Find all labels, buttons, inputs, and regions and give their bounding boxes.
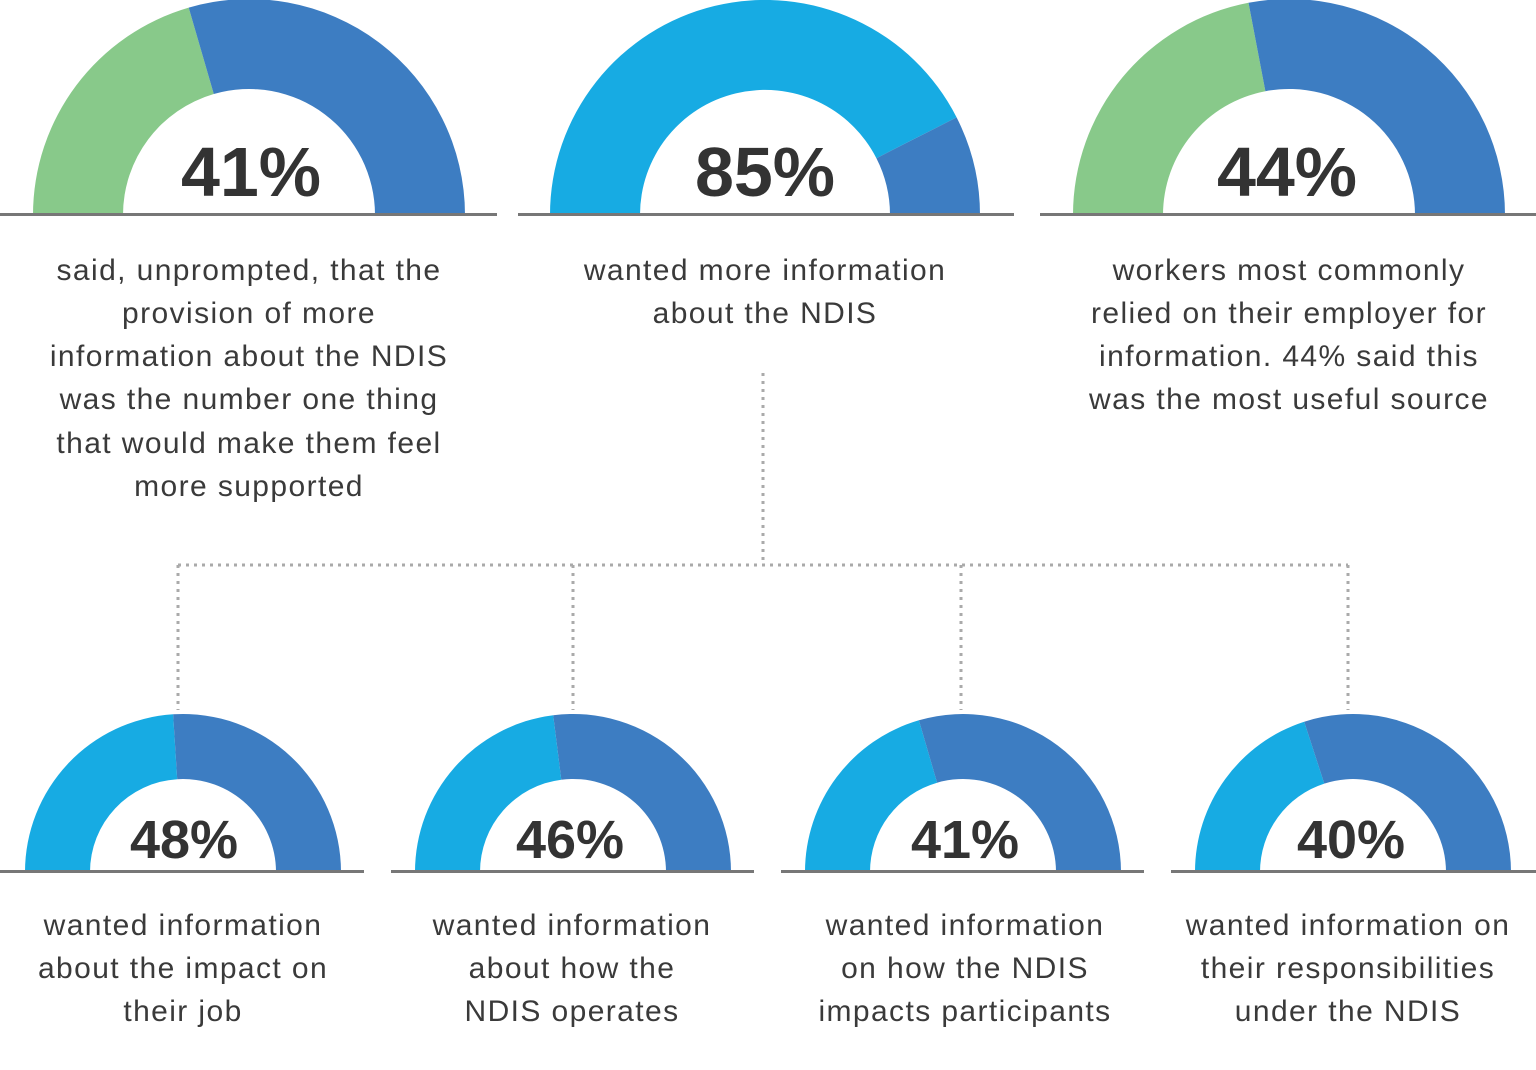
text: 48% description: about the impact on [38,952,328,985]
text: 41% bottom description: impacts participants [818,995,1112,1028]
text: 46% description [432,909,711,1028]
text: 48% description [38,909,328,1028]
text: 46% description: wanted information [432,909,711,942]
text: 85% description: about the NDIS [653,297,877,330]
gauge: 40% [1171,714,1536,873]
gauge: 46%: 46% [516,810,624,870]
gauge: 41% top [0,0,497,216]
text: 41% description [50,254,448,503]
text: 40% description: under the NDIS [1235,995,1461,1028]
gauge: 40%: 40% [1297,810,1405,870]
gauge: 48%: 48% [130,810,238,870]
text: 44% description: workers most commonly [1112,254,1465,287]
text: 85% description [583,254,946,330]
text: 40% description: wanted information on [1185,909,1510,942]
gauge: 46% [391,714,754,873]
text: 41% description: more supported [134,470,364,503]
text: 41% bottom description [818,909,1112,1028]
gauge: 48% [0,714,364,873]
text: 85% description: wanted more information [583,254,946,287]
text: 41% bottom description: on how the NDIS [841,952,1089,985]
gauge: 44% [1040,0,1536,216]
text: 41% description: was the number one thing [59,383,438,416]
text: 41% bottom description: wanted information [825,909,1104,942]
text: 46% description: NDIS operates [465,995,679,1028]
text: 48% description: wanted information [43,909,322,942]
text: 41% description: said, unprompted, that the [57,254,441,287]
text: 44% description: information. 44% said this [1099,340,1479,373]
text: 44% description: relied on their employer for [1091,297,1487,330]
text: 40% description: their responsibilities [1201,952,1495,985]
text: 48% description: their job [123,995,243,1028]
gauge: 44%: 44% [1217,133,1357,211]
text: 41% description: that would make them feel [56,427,442,460]
text: 41% description: provision of more [122,297,376,330]
gauge: 85%: 85% [695,133,835,211]
text: 46% description: about how the [469,952,675,985]
text: 40% description [1185,909,1510,1028]
text: 41% description: information about the NDIS [50,340,448,373]
gauge: 41% bottom: 41% [911,810,1019,870]
gauge: 41% bottom [781,714,1144,873]
connector dotted lines [178,373,1348,710]
text: 44% description [1088,254,1489,416]
text: 44% description: was the most useful source [1088,383,1489,416]
gauge: 41% top: 41% [181,133,321,211]
gauge: 85% [518,0,1014,216]
